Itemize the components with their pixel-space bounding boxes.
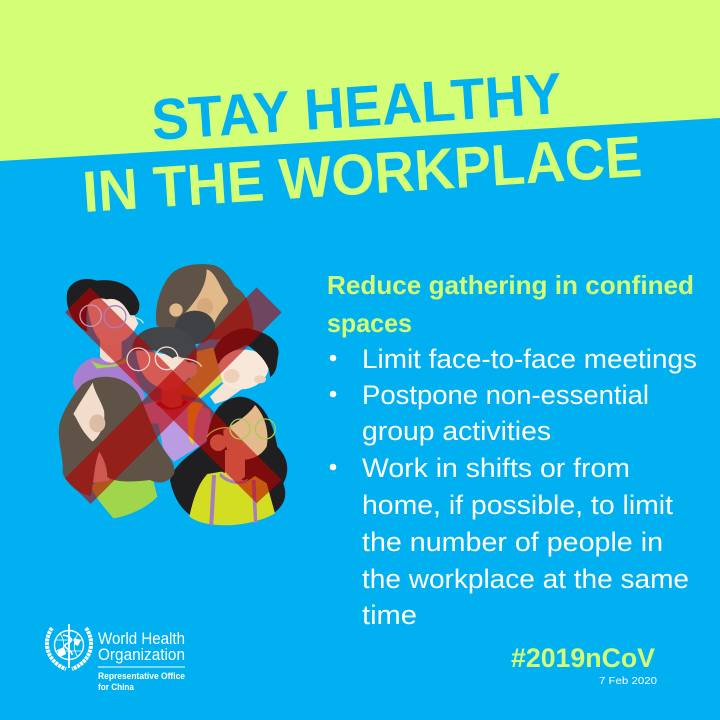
person: center with glasses [132, 327, 213, 462]
heading: Reduce gathering [327, 270, 694, 338]
bullet list: time [362, 600, 417, 630]
bullet list: the workplace at the same [362, 564, 689, 594]
date: 7 Feb 2020 [599, 675, 657, 687]
bullet list: Limit face-to-face meetings [362, 344, 697, 374]
bullet list: Work in shifts or from [362, 453, 630, 483]
logo wordmark: for China [98, 682, 135, 693]
bullet list [330, 344, 697, 630]
heading: Reduce gathering: Reduce gathering in confined [327, 270, 694, 300]
logo wordmark: Representative Office [98, 671, 185, 682]
cross stroke: top-right to bottom-left diagonal [65, 287, 282, 504]
bullet list: group activities [362, 416, 551, 446]
glasses and facial details [80, 305, 275, 439]
illustration: group of people with red crosses [59, 264, 287, 525]
logo wordmark: Organization [98, 645, 185, 664]
bullet list: Postpone non-essential [362, 380, 649, 410]
title: IN THE WORKPLACE [81, 124, 644, 225]
cross stroke: top-left to bottom-right diagonal [65, 287, 282, 503]
person: top right woman [156, 264, 253, 344]
person: right man's shirt [178, 347, 223, 398]
bullet list: the number of people in [362, 527, 663, 557]
person: bottom left woman [59, 377, 175, 518]
person: bottom right woman with glasses [170, 397, 287, 525]
logo wordmark: World Health [98, 629, 185, 648]
person: right man [208, 328, 279, 404]
heading: Reduce gathering: spaces [327, 308, 412, 338]
WHO logo [47, 624, 185, 693]
person: top left man [67, 279, 145, 423]
logo wordmark [98, 629, 185, 693]
icon: WHO emblem [47, 624, 91, 669]
title [81, 61, 644, 225]
hashtag: #2019nCoV [511, 643, 655, 673]
bullet list: home, if possible, to limit [362, 490, 674, 520]
title: STAY HEALTHY [150, 61, 564, 153]
lime header band [0, 0, 720, 161]
